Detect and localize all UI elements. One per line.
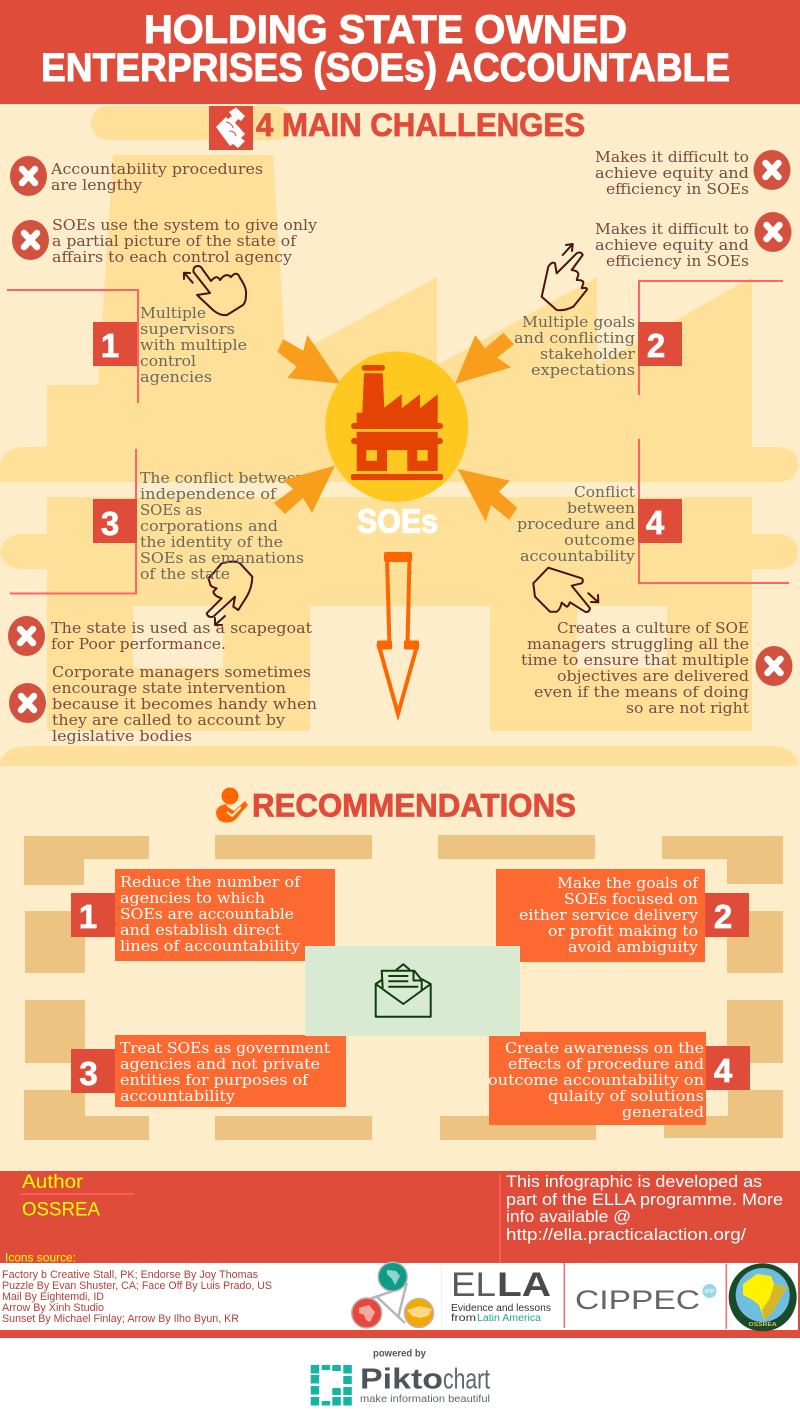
challenge 1 consequence: partial picture: SOEs use the system to give only [52, 216, 318, 234]
challenge 4 consequence: culture of struggling: objectives are delivered [557, 667, 749, 685]
icon credits: Mail By Eightemdi, ID [2, 1291, 104, 1303]
challenge 2 consequence: equity and efficiency: Makes it difficult to [595, 148, 749, 166]
challenge 4 consequence: culture of struggling: managers struggling all the [527, 635, 749, 653]
icon: pointing hand 2 [542, 244, 587, 310]
challenge 3: independence vs identity: 3 [101, 505, 119, 542]
logo: Piktochart: chart [443, 1364, 490, 1396]
programme note [499, 1172, 783, 1263]
challenge 1: multiple supervisors: Multiple [140, 304, 206, 322]
heading: recommendations: RECOMMENDATIONS [252, 788, 576, 824]
author block: Author [22, 1172, 84, 1193]
recommendation 2: either service delivery [519, 906, 699, 924]
title banner: ENTERPRISES (SOEs) ACCOUNTABLE [41, 46, 730, 90]
recommendation 1: and establish direct [120, 921, 281, 939]
challenge 3 consequence: state intervention: legislative bodies [52, 727, 192, 745]
icon credits: Puzzle By Evan Shuster, CA; Face Off By Luis Prado, US [2, 1280, 272, 1292]
challenge 2 consequence: equity and efficiency repeated: achieve equity and [595, 236, 749, 254]
challenge 1: multiple supervisors: with multiple [140, 336, 247, 354]
programme note: http://ella.practicalaction.org/ [506, 1225, 746, 1244]
challenge 3 consequence: state intervention: Corporate managers sometimes [52, 663, 311, 681]
challenge 2: multiple goals: and conflicting [514, 329, 635, 347]
challenge 2: multiple goals: expectations [531, 361, 635, 379]
challenge 2 consequence: equity and efficiency repeated: Makes it difficult to [595, 220, 749, 238]
recommendation 1: Reduce the number of [120, 873, 302, 891]
recommendation 3: Treat SOEs as government [120, 1039, 330, 1057]
challenge 4 consequence: culture of struggling: so are not right [626, 699, 749, 717]
icon credits: Arrow By Xinh Studio [2, 1302, 104, 1314]
challenge 3 consequence: scapegoat [8, 616, 312, 656]
logo: ELLA [441, 1265, 551, 1328]
challenge 1: multiple supervisors: control [140, 352, 196, 370]
recommendation 1: SOEs are accountable [120, 905, 294, 923]
challenge 1: multiple supervisors [7, 290, 247, 403]
recommendation 4: outcome accountability on [488, 1071, 704, 1089]
author block: OSSREA [22, 1200, 100, 1220]
arrows pointing to the SOEs circle [274, 333, 517, 522]
challenge 4 consequence: culture of struggling [521, 619, 792, 717]
icon: Piktochart grid [311, 1365, 352, 1406]
challenge 4: procedure vs outcome: between [567, 499, 635, 517]
icon: person with check [216, 788, 248, 823]
background: factory silhouette [0, 106, 798, 766]
recommendation 2 [496, 869, 749, 962]
challenge 1 consequence: lengthy procedures: are lengthy [51, 176, 143, 194]
footer band [0, 1171, 800, 1338]
challenge 2 consequence: equity and efficiency repeated [595, 212, 792, 270]
logo: OSSREA seal: OSSREA [749, 1322, 777, 1328]
programme note: This infographic is developed as [506, 1172, 762, 1191]
challenge 3: independence vs identity: the identity of the [140, 533, 283, 551]
panel: green envelope card [305, 946, 520, 1036]
powered by label: powered by [373, 1348, 426, 1360]
recommendation 4: effects of procedure and [508, 1055, 704, 1073]
icon credits: Factory b Creative Stall, PK; Endorse By Joy Thomas [2, 1269, 258, 1281]
challenge 4 consequence: culture of struggling: even if the means of doing [534, 683, 749, 701]
challenge 2: multiple goals: 2 [647, 327, 665, 364]
challenge 1 consequence: lengthy procedures: Accountability procedures [50, 160, 263, 178]
challenge 1: multiple supervisors: agencies [140, 368, 212, 386]
author block [20, 1172, 134, 1220]
challenge 2 consequence: equity and efficiency [595, 148, 790, 198]
challenge 1 consequence: partial picture: affairs to each control agency [52, 248, 293, 266]
logo: Piktochart [311, 1364, 490, 1406]
arrow: down to recommendations [377, 552, 419, 714]
challenge 4: procedure vs outcome [517, 439, 789, 583]
challenge 3 consequence: state intervention: encourage state intervention [52, 679, 286, 697]
logo: ELLA: Evidence and lessons [451, 1303, 551, 1314]
challenge 2: multiple goals [514, 281, 783, 395]
challenge 3 consequence: state intervention: because it becomes handy when [52, 695, 317, 713]
challenge 3 consequence: state intervention [9, 663, 317, 745]
challenge 4 consequence: culture of struggling: time to ensure that multiple [521, 651, 749, 669]
challenge 4: procedure vs outcome: accountability [520, 547, 636, 565]
icon: pointing hand 3 [207, 562, 252, 625]
recommendation 2: or profit making to [548, 922, 698, 940]
challenge 2 consequence: equity and efficiency: achieve equity and [595, 164, 749, 182]
recommendation 2: avoid ambiguity [568, 938, 699, 956]
challenge 2: multiple goals: Multiple goals [522, 313, 635, 331]
challenge 3 consequence: state intervention: they are called to account by [52, 711, 286, 729]
challenge 4 consequence: culture of struggling: Creates a culture of SOE [557, 619, 749, 637]
recommendation 1: lines of accountability [120, 937, 301, 955]
recommendation 2: Make the goals of [557, 874, 699, 892]
icon credits [2, 1269, 272, 1325]
title banner [0, 0, 800, 104]
logo: ELLA: EL [451, 1266, 496, 1304]
icons source label: Icons source: [5, 1252, 76, 1264]
challenge 3 consequence: scapegoat: for Poor performance. [51, 635, 226, 653]
recommendation 1: 1 [79, 898, 97, 935]
recommendation 3: entities for purposes of [120, 1071, 310, 1089]
logo: ELLA: from [451, 1313, 476, 1324]
logo: CIPPEC: CIPPEC [575, 1285, 700, 1315]
programme note: part of the ELLA programme. More [506, 1190, 783, 1209]
challenge 1: multiple supervisors: 1 [101, 327, 119, 364]
icon: pointing hand 4 [533, 568, 598, 612]
challenge 4: procedure vs outcome: outcome [564, 531, 635, 549]
recommendation 1: agencies to which [120, 889, 265, 907]
heading: 4 main challenges: 4 MAIN CHALLENGES [256, 107, 585, 143]
logo: three continents [352, 1262, 434, 1328]
logo: Piktochart: Pikto [360, 1364, 443, 1396]
logo: ELLA: Latin America [477, 1313, 541, 1324]
icon: puzzle [209, 106, 253, 150]
logo: CIPPEC: IPP [705, 1290, 714, 1296]
logo: ELLA: LA [497, 1266, 551, 1304]
challenge 3: independence vs identity: independence of [140, 485, 278, 503]
logo: CIPPEC [564, 1263, 727, 1329]
recommendation 3: 3 [79, 1055, 98, 1092]
recommendation 4: 4 [714, 1052, 733, 1089]
challenge 4: procedure vs outcome: 4 [646, 504, 665, 541]
recommendation 4: qulaity of solutions [548, 1087, 704, 1105]
icon: open envelope [376, 964, 431, 1017]
white logo strip [0, 1263, 798, 1330]
challenge 2 consequence: equity and efficiency: efficiency in SOEs [606, 180, 749, 198]
challenge 1 consequence: partial picture [12, 216, 318, 266]
icon credits: Sunset By Michael Finlay; Arrow By Ilho Byun, KR [2, 1313, 239, 1325]
recommendation 4: generated [622, 1103, 704, 1121]
background: tan frame blocks [24, 835, 783, 1140]
recommendation 1 [71, 869, 335, 961]
challenge 3: independence vs identity [10, 449, 306, 594]
challenge 3 consequence: scapegoat: The state is used as a scapegoat [51, 619, 312, 637]
recommendation 3: agencies and not private [120, 1055, 320, 1073]
recommendation 4: Create awareness on the [505, 1039, 704, 1057]
recommendation 3: accountability [120, 1087, 236, 1105]
challenge 1: multiple supervisors: supervisors [140, 320, 235, 338]
recommendation 3 [71, 1035, 346, 1107]
challenge 3: independence vs identity: SOEs as emanations [140, 549, 304, 567]
programme note: info available @ [506, 1207, 631, 1226]
title banner: HOLDING STATE OWNED [144, 8, 627, 52]
challenge 4: procedure vs outcome: Conflict [574, 483, 635, 501]
logo: OSSREA seal [729, 1263, 797, 1331]
challenge 1 consequence: partial picture: a partial picture of the state of [52, 232, 298, 250]
SOEs circle with factory icon [325, 351, 468, 502]
icon: pointing hand 1 [184, 266, 246, 315]
challenge 4: procedure vs outcome: procedure and [517, 515, 635, 533]
challenge 1 consequence: lengthy procedures [10, 156, 263, 196]
logo: Piktochart: make information beautiful [360, 1393, 490, 1405]
challenge 3: independence vs identity: corporations and [140, 517, 278, 535]
challenge 2: multiple goals: stakeholder [540, 345, 636, 363]
recommendation 2: 2 [714, 898, 732, 935]
challenge 3: independence vs identity: The conflict between [140, 469, 306, 487]
label: SOEs: SOEs [357, 502, 438, 540]
challenge 3: independence vs identity: of the state [140, 565, 230, 583]
challenge 2 consequence: equity and efficiency repeated: efficiency in SOEs [606, 252, 749, 270]
challenge 3: independence vs identity: SOEs as [140, 501, 202, 519]
recommendation 2: SOEs focused on [564, 890, 698, 908]
recommendation 4 [488, 1032, 750, 1125]
